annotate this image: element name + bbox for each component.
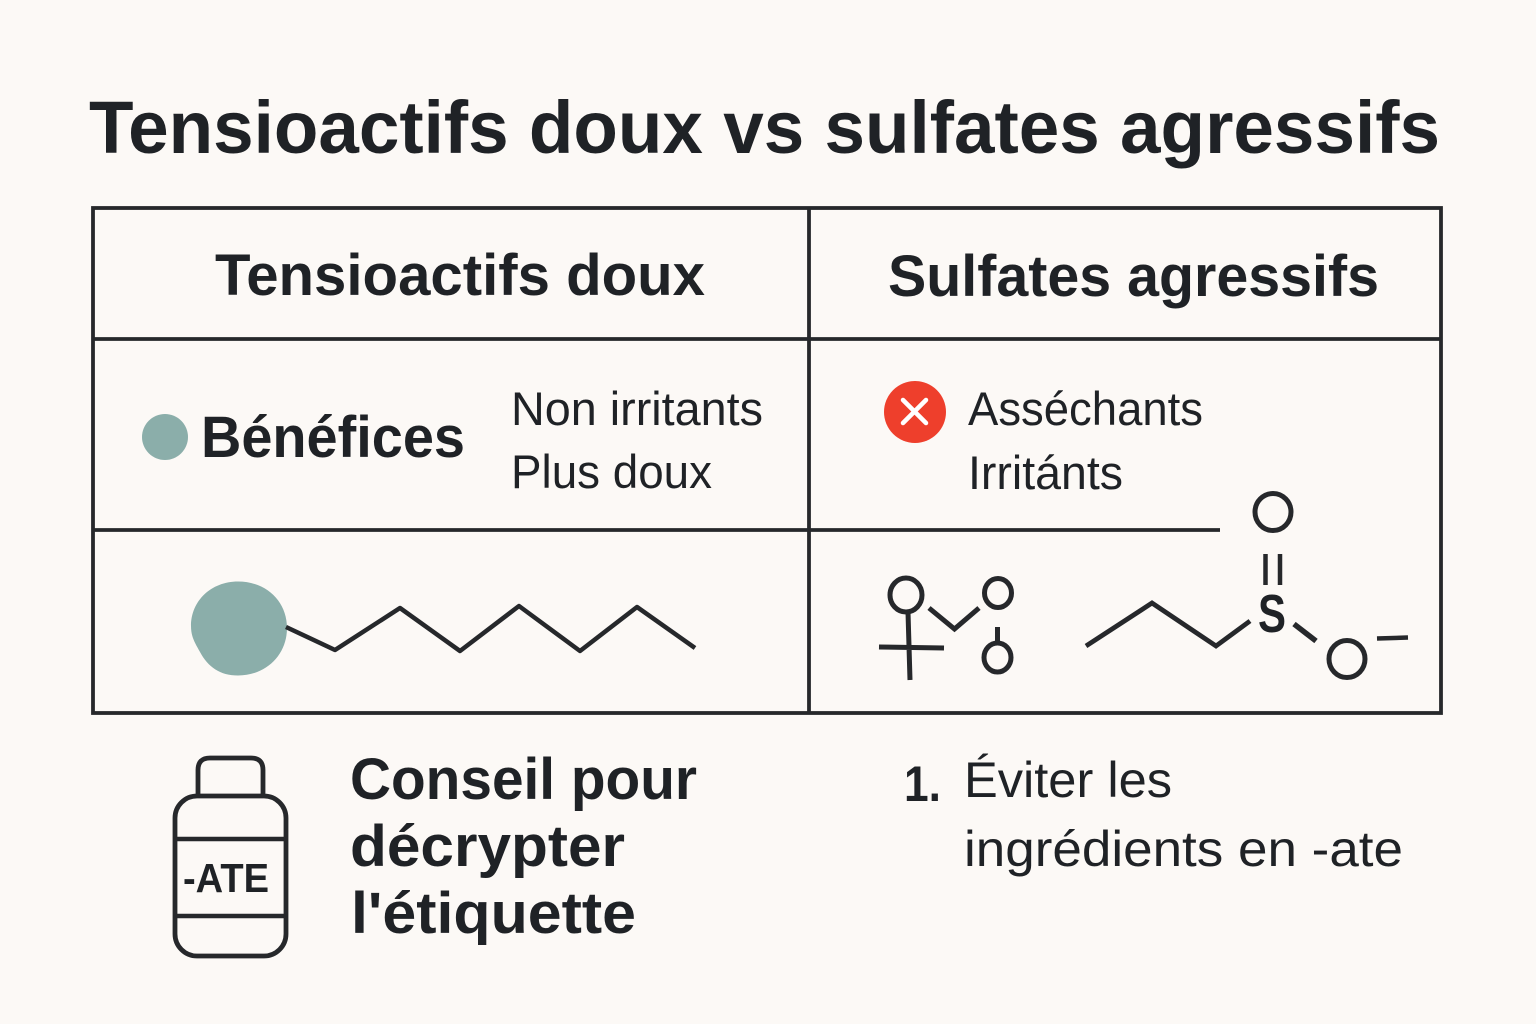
molecule: left sulfate fragment: [879, 578, 1012, 680]
comparison table: [93, 208, 1441, 713]
molecule: sulfate chain: [1086, 494, 1408, 678]
text: tip heading: décrypter: [350, 814, 625, 879]
molecule: gentle surfactant: [191, 582, 695, 676]
icon: bottle: [175, 758, 286, 956]
heading: sulfates agressifs: Sulfates agressifs: [888, 244, 1379, 309]
text: drawbacks list: Asséchants: [968, 382, 1203, 435]
text: tip heading: Conseil pour: [350, 747, 697, 812]
icon: red cross: [884, 381, 946, 443]
text: drawbacks list: [968, 382, 1203, 499]
icon: bottle: -ATE: [183, 855, 269, 901]
text: benefits list: Non irritants: [511, 382, 763, 435]
icon: benefit dot: [142, 414, 188, 460]
text: tip item: ingrédients en -ate: [964, 821, 1403, 877]
text: drawbacks list: Irritánts: [968, 446, 1123, 499]
text: tip item: Éviter les: [964, 752, 1172, 808]
text: tip item: [904, 752, 1403, 877]
text: tip item: 1.: [904, 756, 941, 812]
title: Tensioactifs doux vs sulfates agressifs: [89, 86, 1440, 169]
heading: tensioactifs doux: Tensioactifs doux: [215, 243, 705, 308]
label: bénéfices: Bénéfices: [201, 405, 465, 470]
text: benefits list: Plus doux: [511, 445, 712, 498]
text: tip heading: l'étiquette: [351, 881, 636, 946]
text: benefits list: [511, 382, 763, 498]
molecule: sulfate chain: S: [1258, 584, 1286, 644]
text: tip heading: [350, 747, 697, 946]
